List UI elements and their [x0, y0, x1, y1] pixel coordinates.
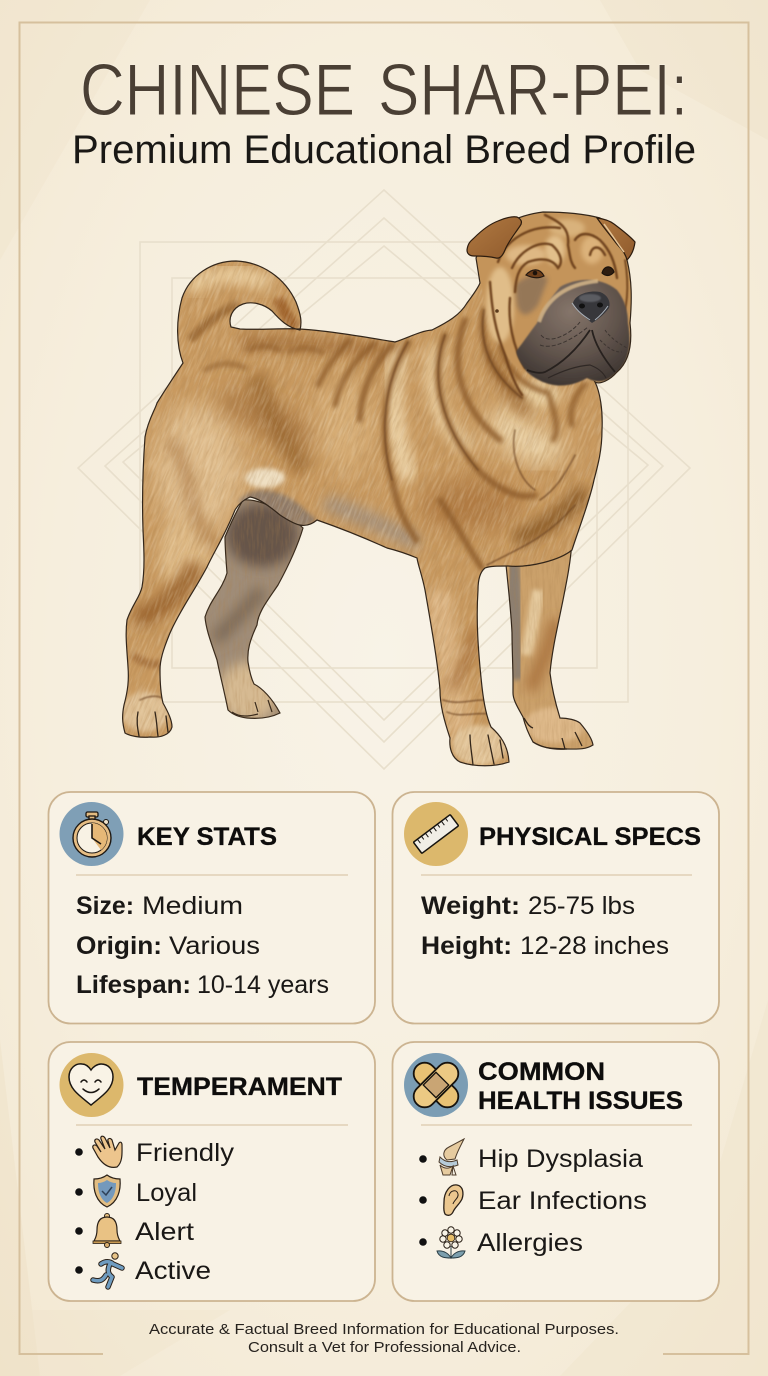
stats list: Medium: [142, 892, 243, 920]
stats list: [76, 892, 329, 999]
head wrinkles: [490, 215, 627, 395]
nose: [573, 292, 610, 323]
specs list: 25-75 lbs: [528, 892, 635, 920]
heading: common health issues: [478, 1058, 683, 1115]
fine wrinkles: [140, 310, 575, 715]
specs list: Height:: [421, 932, 512, 960]
heading: common health issues: COMMON: [478, 1058, 605, 1086]
heading: temperament: TEMPERAMENT: [137, 1073, 342, 1101]
icon: runner: [93, 1253, 122, 1287]
head base: [476, 212, 631, 380]
title: CHINESE: [80, 50, 355, 131]
panel: common health issues: [392, 1042, 719, 1301]
panel: temperament: [48, 1042, 375, 1301]
icon: shield: [94, 1175, 120, 1207]
title: [80, 50, 688, 131]
temperament list: Alert: [135, 1218, 194, 1246]
temperament list: Loyal: [136, 1179, 197, 1207]
heading: physical specs: PHYSICAL SPECS: [479, 823, 701, 851]
stats list: 10-14 years: [197, 971, 329, 999]
temperament list: Friendly: [136, 1139, 235, 1167]
specs list: 12-28 inches: [520, 932, 669, 960]
health list: Allergies: [477, 1229, 583, 1257]
specs list: [421, 892, 669, 960]
health list: Ear Infections: [478, 1187, 647, 1215]
footer disclaimer: [149, 1321, 619, 1356]
specs list: Weight:: [421, 892, 520, 920]
illustration: Chinese Shar-Pei dog: [122, 211, 636, 766]
far front leg: [506, 550, 594, 750]
icon: smiling heart: [60, 1053, 124, 1117]
geometric backdrop pattern: [78, 190, 690, 769]
health list: [419, 1139, 647, 1258]
soft fold shadows: [205, 310, 585, 568]
icon: stopwatch: [60, 802, 124, 866]
ears: [467, 217, 635, 260]
icon: hip joint: [439, 1139, 464, 1175]
icon: bell: [93, 1214, 121, 1248]
title: SHAR-PEI:: [378, 50, 688, 131]
temperament list: [75, 1136, 235, 1287]
stats list: Origin:: [76, 932, 162, 960]
footer disclaimer: Consult a Vet for Professional Advice.: [248, 1339, 521, 1356]
footer disclaimer: Accurate & Factual Breed Information for Educational Purposes.: [149, 1321, 619, 1338]
icon: ear: [444, 1185, 463, 1215]
heading: common health issues: HEALTH ISSUES: [478, 1087, 683, 1115]
stats list: Various: [169, 932, 260, 960]
temperament list: Active: [135, 1257, 211, 1285]
heading: key stats: KEY STATS: [137, 823, 277, 851]
subtitle: Premium Educational Breed Profile: [72, 128, 696, 172]
icon: flower: [437, 1227, 465, 1258]
health list: Hip Dysplasia: [478, 1145, 643, 1173]
far hind leg: [204, 499, 304, 719]
body, head and near legs: [122, 211, 636, 766]
eyes: [526, 270, 544, 278]
icon: bandage: [404, 1053, 468, 1117]
panel: key stats: [48, 792, 375, 1024]
muzzle: [516, 280, 630, 386]
paw toes: [137, 712, 503, 765]
body shading: [0, 0, 768, 1025]
icon: waving hand: [93, 1136, 122, 1167]
icon: ruler: [404, 802, 468, 866]
panel: physical specs: [392, 792, 719, 1024]
stats list: Size:: [76, 892, 134, 920]
stats list: Lifespan:: [76, 971, 191, 999]
